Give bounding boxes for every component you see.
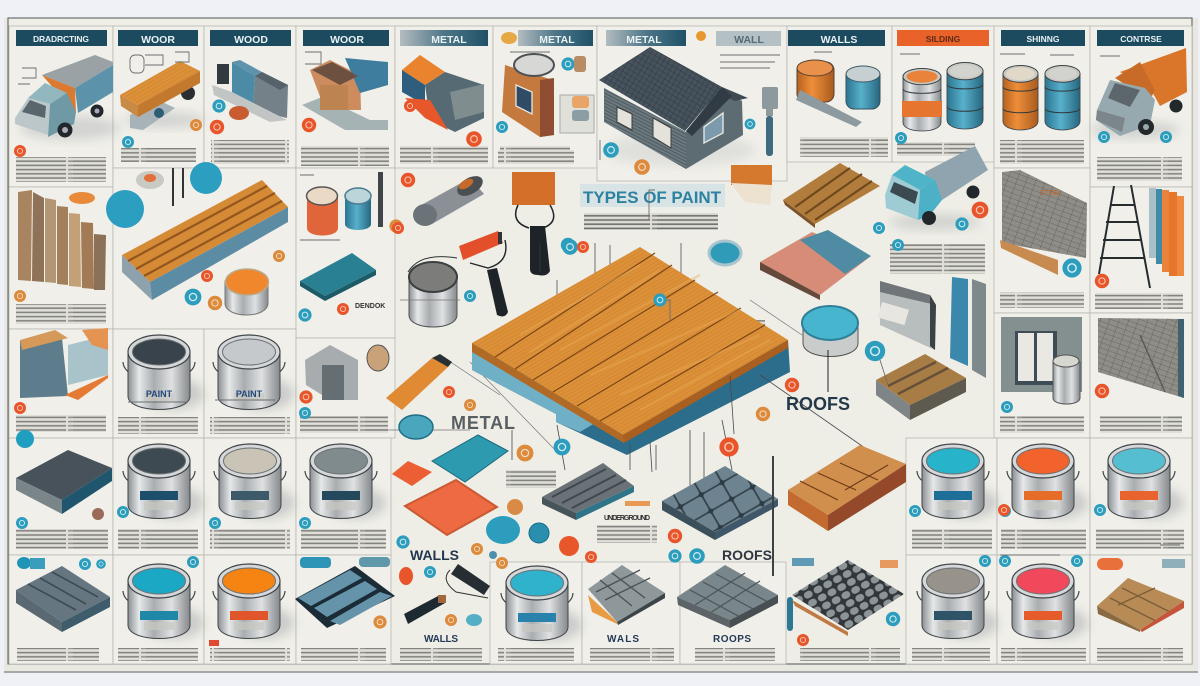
illustration: wood beam on wheels: [120, 61, 205, 130]
banner: walls: WALLS: [821, 34, 857, 46]
title: TYPES OF PAINT: [583, 188, 722, 207]
banner: wood 1: WOOR: [141, 34, 175, 46]
banner: coatings: CONTRSE: [1120, 34, 1162, 44]
illustration: metal cabinets: [212, 60, 288, 122]
banner: metal 1: METAL: [431, 34, 467, 46]
illustration: grey ridged tile: UNDERGROUND: [604, 515, 650, 522]
illustration: grey ridged tile: [542, 463, 650, 522]
banner: shining: SHINNG: [1026, 34, 1060, 44]
label: walls (bottom): WALLS: [424, 634, 458, 645]
scattered sketch marks and small icons: [18, 52, 1180, 555]
illustration: stacked wood bricks: [788, 445, 906, 531]
illustration: layered wood board: [1097, 558, 1185, 632]
banner: walls: [788, 30, 885, 46]
banner: shining: [1001, 30, 1085, 46]
illustration: paint cans row 5 left: [123, 556, 294, 646]
banner: drafting: DRADRCTING: [33, 34, 89, 44]
banner: siding: SILDING: [926, 34, 961, 44]
illustration: teal tile: [298, 253, 385, 322]
callouts: centre leader lines and badges: [512, 341, 885, 510]
illustration: paint rolls stack: [392, 172, 486, 234]
illustration: light paint can (PAINT): [213, 335, 294, 410]
illustration: dark pebble roof tile: [792, 558, 904, 646]
illustration: paint cans row 4 right: [909, 444, 1184, 519]
illustration: collage, siding and orange panels: [14, 328, 108, 414]
illustration: orange box and metal wall: [402, 55, 484, 147]
banner: wood 3: WOOR: [330, 34, 364, 46]
illustration: metal rails and paint cans: [796, 60, 1080, 131]
illustration: slate shingles strip: [295, 557, 395, 629]
illustration: brick wall: [1000, 170, 1087, 278]
illustration: stone paver slab: [662, 456, 778, 576]
label: roops: ROOPS: [713, 634, 751, 645]
illustration: blue pail and lines: [365, 239, 802, 455]
illustration: large house with slate roof: [599, 47, 755, 169]
banner: wall: WALL: [734, 34, 764, 46]
illustration: teal truck: [873, 146, 988, 234]
illustration: dark paint roller: [399, 564, 490, 626]
illustration: orange paint tin: [185, 250, 285, 315]
illustration: paint bucket: [408, 257, 457, 327]
illustration: paint can row 5 centre: [501, 566, 582, 641]
illustration: blue/pink tile: [760, 230, 871, 300]
illustration: long wood beam: [106, 162, 288, 300]
illustration: paint can row 4: [117, 444, 386, 529]
banner: metal 3: [606, 30, 686, 46]
banner: wood 1: [118, 30, 198, 46]
label: roofs (centre right): ROOFS: [786, 394, 850, 414]
illustration: metal sheet collage: [299, 345, 389, 419]
illustration: dark shingle pack: [16, 430, 112, 529]
banner: drafting: [16, 30, 107, 46]
label: walls (middle): WALLS: [410, 547, 459, 563]
banner: siding: [897, 30, 989, 46]
illustration: large paint brush: [512, 172, 575, 276]
illustration: blue paint pan: [802, 306, 858, 392]
illustration: brick wall: STEEL: [1040, 190, 1062, 197]
illustration: grey paint can (PAINT): [123, 335, 204, 410]
banner: metal 2: METAL: [539, 34, 575, 46]
illustration: wood plank row: [14, 190, 106, 302]
illustration: cream paint brush: [731, 165, 772, 205]
label: roofs (lower): ROOFS: [722, 547, 772, 563]
header banners: [16, 30, 1184, 46]
illustration: red and blue tins: [306, 172, 403, 236]
illustration: grey paint can (PAINT): PAINT: [146, 389, 173, 399]
banner: metal 1: [400, 30, 488, 46]
illustration: house cutaway: [302, 58, 388, 130]
label: metal: METAL: [451, 413, 515, 433]
illustration: paint cans row 5 right: [917, 555, 1088, 639]
banner: coatings: [1097, 30, 1184, 46]
banner: metal 2: [501, 30, 593, 46]
title description: [584, 213, 718, 230]
illustration: siding panel: [878, 281, 936, 350]
banner: wood 2: [210, 30, 291, 46]
illustration: truck, blue cargo: [15, 55, 120, 140]
illustration: central wooden deck: [472, 247, 790, 455]
illustration: ribbed roof panel: [16, 557, 110, 632]
illustration: orange covered truck: [1090, 48, 1187, 139]
text blocks: [16, 137, 1184, 661]
illustration: small paint brush: [603, 87, 778, 175]
illustration: striped wood block: [876, 354, 966, 420]
illustration: light paint can (PAINT): PAINT: [236, 389, 263, 399]
illustration: teal and orange trays: [392, 435, 597, 569]
illustration: brick wall paint can: [496, 54, 594, 137]
illustration: tile block: [677, 565, 790, 628]
banner: wood 3: [303, 30, 389, 46]
illustration: teal tile: DENDOK: [355, 303, 385, 310]
illustration: ladder and colour panels: [1095, 185, 1184, 288]
banner: wood 2: WOOD: [234, 34, 268, 46]
scattered badges: [14, 99, 1172, 516]
illustration: wooden pallet: [783, 163, 880, 228]
banner: metal 3: METAL: [626, 34, 662, 46]
illustration: orange paint roller: [386, 354, 476, 439]
illustration: red paint roller: [459, 231, 508, 316]
illustration: cracked stone with orange base: [588, 565, 665, 625]
illustration: window and small can: [1001, 317, 1082, 413]
banner: wall: [696, 31, 781, 46]
label: wals: WALS: [607, 634, 639, 645]
illustration: blue vertical boards: [950, 277, 986, 378]
illustration: textured wall: [1095, 318, 1184, 398]
title panel: types of paint: [580, 182, 725, 234]
